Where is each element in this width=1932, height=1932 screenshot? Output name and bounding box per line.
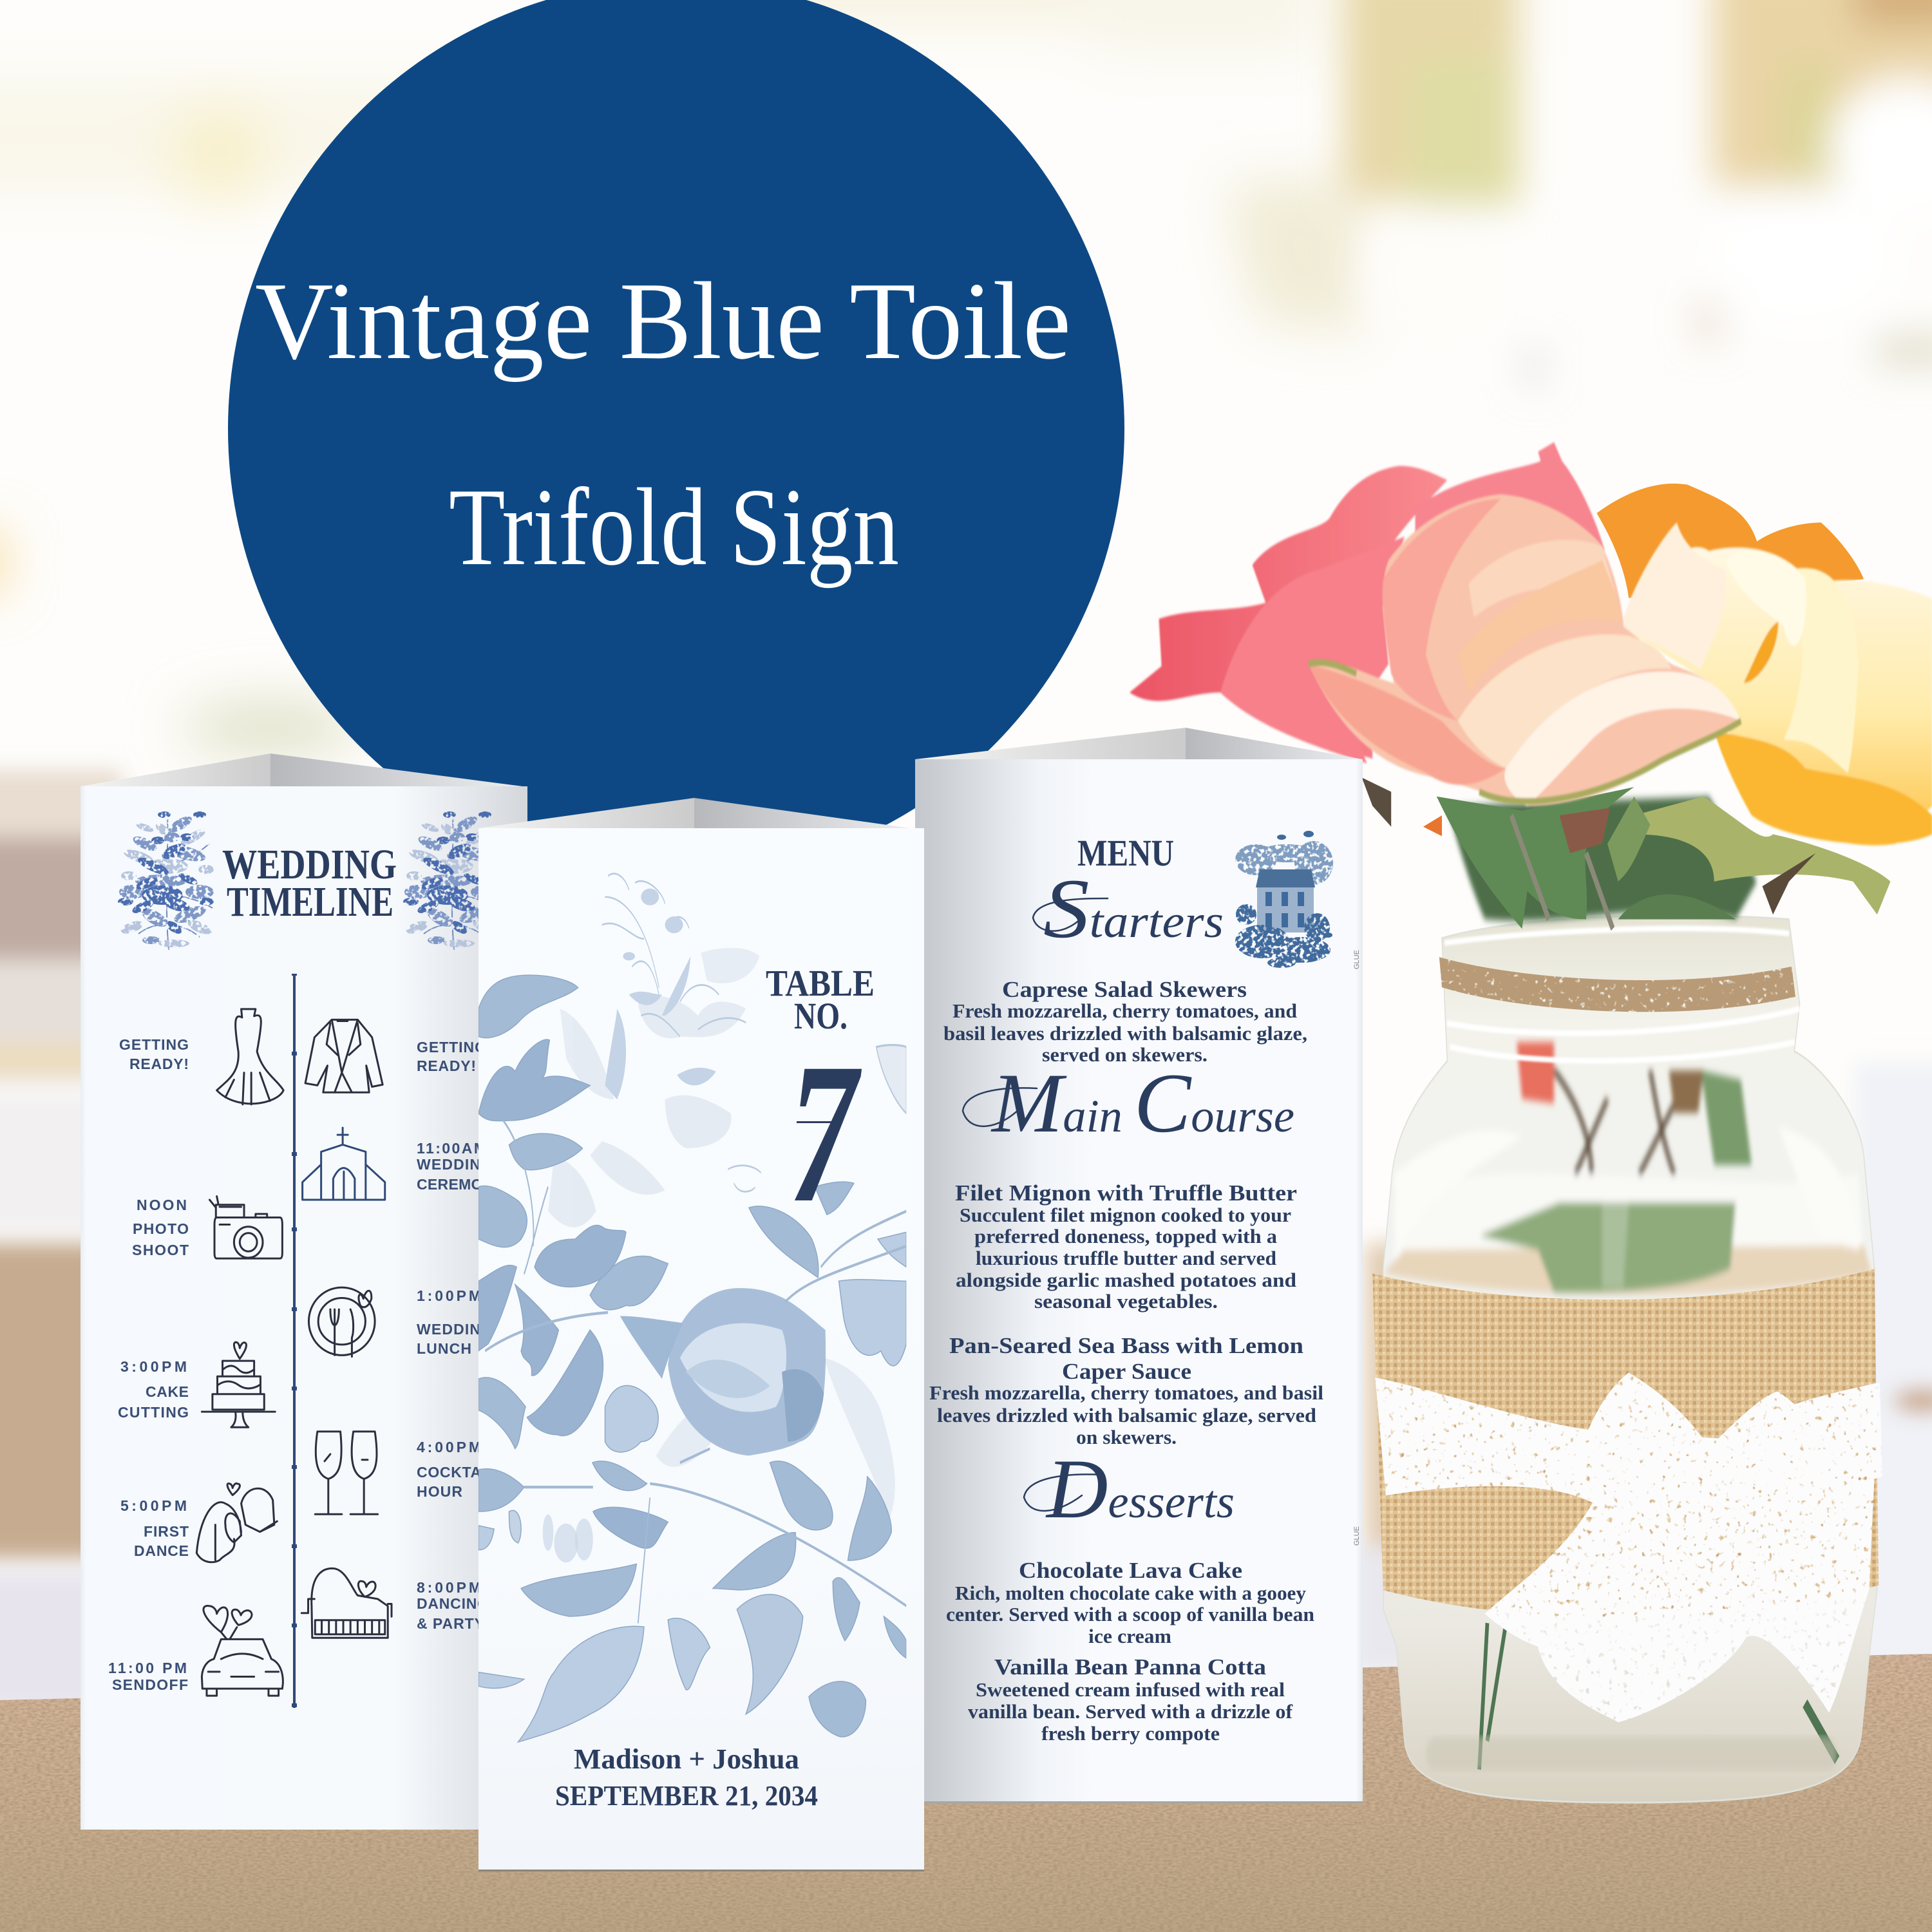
stems and leaves in the water (1383, 1042, 1871, 1295)
right timeline labels: GETTING (417, 1039, 486, 1056)
panel bottom shadow (915, 1801, 1363, 1804)
main course item two: Caper Sauce (1062, 1359, 1191, 1384)
heading wedding timeline (222, 841, 397, 925)
glue marks: GLUE (1353, 1526, 1361, 1546)
green leaves under roses (1362, 777, 1891, 929)
left timeline labels: GETTING (119, 1036, 189, 1053)
icon: first dance couple (196, 1483, 277, 1562)
panel back fold (478, 798, 915, 829)
title line 2: Trifold Sign (449, 466, 899, 589)
dessert item one (946, 1558, 1314, 1647)
main course item one: seasonal vegetables. (1034, 1290, 1218, 1312)
starters item (943, 977, 1307, 1066)
right timeline labels (417, 1039, 504, 1632)
dessert item one: ice cream (1088, 1625, 1171, 1647)
table heading (766, 962, 875, 1037)
floral ornament right (403, 811, 499, 950)
left timeline labels: NOON (137, 1197, 187, 1213)
flowers and mason jar (1130, 442, 1932, 1803)
lower stem right (1805, 1703, 1837, 1760)
heading line 1: WEDDING (222, 841, 397, 888)
couple names: Madison + Joshua (574, 1743, 799, 1775)
heading menu: MENU (1077, 832, 1174, 874)
left timeline labels: READY! (129, 1056, 189, 1072)
starters item: basil leaves drizzled with balsamic glaze, (943, 1022, 1307, 1045)
toile house illustration (1235, 831, 1333, 968)
left timeline labels: FIRST (144, 1523, 189, 1540)
floral ornament left (118, 811, 214, 950)
wedding date: SEPTEMBER 21, 2034 (555, 1780, 818, 1812)
heading line 2: TIMELINE (227, 878, 393, 925)
left timeline labels (108, 1036, 189, 1693)
icon: tuxedo (305, 1019, 383, 1092)
panel: table number (478, 798, 924, 1871)
jar base (1426, 1736, 1837, 1770)
right timeline labels: LUNCH (417, 1340, 471, 1357)
main course item one (955, 1180, 1297, 1312)
right timeline labels: DANCING (417, 1595, 489, 1612)
script heading main course: Main Course (990, 1056, 1294, 1150)
script heading starters: Starters (1043, 861, 1224, 956)
glass jar (1383, 916, 1877, 1803)
panel face (915, 759, 1363, 1803)
pink rose (1130, 442, 1605, 763)
swash (1033, 898, 1108, 931)
right timeline labels: HOUR (417, 1483, 462, 1500)
left timeline labels: SENDOFF (112, 1676, 188, 1693)
icon: plate (308, 1287, 375, 1357)
panel back fold (80, 753, 527, 787)
right timeline labels: 1:00PM (417, 1287, 481, 1304)
table burlap runner (0, 1636, 1932, 1932)
heading line 1: TABLE (766, 962, 875, 1004)
right timeline labels: WEDDING (417, 1321, 493, 1338)
main course item one: Filet Mignon with Truffle Butter (955, 1180, 1297, 1206)
icon: getaway car (202, 1605, 283, 1696)
swash (963, 1088, 1037, 1126)
dessert item two: vanilla bean. Served with a drizzle of (968, 1700, 1293, 1723)
dessert item two: Sweetened cream infused with real (976, 1678, 1285, 1701)
main course item one: luxurious truffle butter and served (976, 1247, 1276, 1269)
icon: camera (209, 1197, 282, 1258)
starters item: Fresh mozzarella, cherry tomatoes, and (952, 999, 1297, 1022)
lace ribbon (1375, 1378, 1882, 1505)
panel face (478, 828, 924, 1870)
right timeline labels: 4:00PM (417, 1439, 481, 1455)
orange rose (1596, 484, 1864, 598)
glue marks: GLUE (1353, 950, 1361, 969)
peach rose (1309, 494, 1741, 806)
dessert item one: Rich, molten chocolate cake with a gooey (955, 1582, 1307, 1604)
glue marks (1353, 950, 1361, 1546)
left timeline labels: 11:00 PM (108, 1660, 187, 1676)
panel back fold (915, 728, 1363, 760)
panel bottom shadow (478, 1869, 924, 1871)
main course item one: Succulent filet mignon cooked to your (960, 1204, 1291, 1226)
left timeline labels: CUTTING (118, 1404, 189, 1421)
jar neck threads (1444, 929, 1800, 1061)
icon: champagne glasses (315, 1432, 378, 1514)
heading line 2: NO. (794, 995, 848, 1037)
main course item two: Fresh mozzarella, cherry tomatoes, and basil (929, 1381, 1323, 1404)
script heading desserts: Desserts (1045, 1441, 1235, 1536)
tulip bloom (620, 1288, 826, 1455)
starters item: served on skewers. (1042, 1043, 1208, 1066)
left timeline labels: SHOOT (132, 1242, 189, 1258)
left timeline labels: PHOTO (133, 1220, 189, 1237)
burlap band (1372, 1269, 1879, 1618)
panel: menu (915, 728, 1363, 1804)
twine wrap (1439, 957, 1795, 1012)
timeline axis (292, 974, 297, 1708)
watercolour botanical artwork (478, 874, 906, 1742)
main course item two: Pan-Seared Sea Bass with Lemon (949, 1333, 1303, 1358)
main course item two: on skewers. (1076, 1426, 1177, 1448)
blue title circle (228, 0, 1124, 877)
timeline icons (196, 1009, 392, 1696)
right timeline labels: CEREMONY (417, 1176, 504, 1193)
dessert item one: Chocolate Lava Cake (1019, 1558, 1242, 1583)
starters item: Caprese Salad Skewers (1002, 977, 1247, 1002)
swash (1024, 1474, 1101, 1511)
title (255, 260, 1071, 589)
main course item two (929, 1333, 1323, 1448)
icon: dress (217, 1009, 283, 1104)
left timeline labels: DANCE (134, 1542, 189, 1559)
panel face (80, 786, 527, 1830)
right timeline labels: READY! (417, 1057, 476, 1074)
main course item one: alongside garlic mashed potatoes and (956, 1269, 1296, 1291)
icon: church (303, 1128, 385, 1200)
lace bow (1484, 1373, 1875, 1722)
dessert item two (968, 1654, 1293, 1745)
icon: piano (301, 1568, 392, 1638)
main course item one: preferred doneness, topped with a (974, 1225, 1278, 1247)
main course item two: leaves drizzled with balsamic glaze, served (937, 1404, 1316, 1426)
panel: wedding timeline (80, 753, 527, 1830)
yellow rose (1621, 522, 1932, 846)
dessert item one: center. Served with a scoop of vanilla bean (946, 1603, 1314, 1625)
right timeline labels: & PARTY (417, 1615, 484, 1632)
icon: cake (202, 1342, 275, 1427)
right timeline labels: 8:00PM (417, 1579, 481, 1596)
right timeline labels: WEDDING (417, 1156, 493, 1173)
left timeline labels: 5:00PM (120, 1497, 187, 1514)
right timeline labels: COCKTAIL (417, 1464, 495, 1481)
left timeline labels: 3:00PM (120, 1358, 187, 1375)
lower stems (1479, 1623, 1506, 1770)
left timeline labels: CAKE (146, 1383, 189, 1400)
table number seven: 7 (789, 1022, 864, 1244)
dessert item two: Vanilla Bean Panna Cotta (994, 1654, 1266, 1680)
title line 1: Vintage Blue Toile (255, 260, 1071, 383)
dessert item two: fresh berry compote (1041, 1722, 1220, 1745)
right timeline labels: 11:00AM (417, 1140, 486, 1157)
